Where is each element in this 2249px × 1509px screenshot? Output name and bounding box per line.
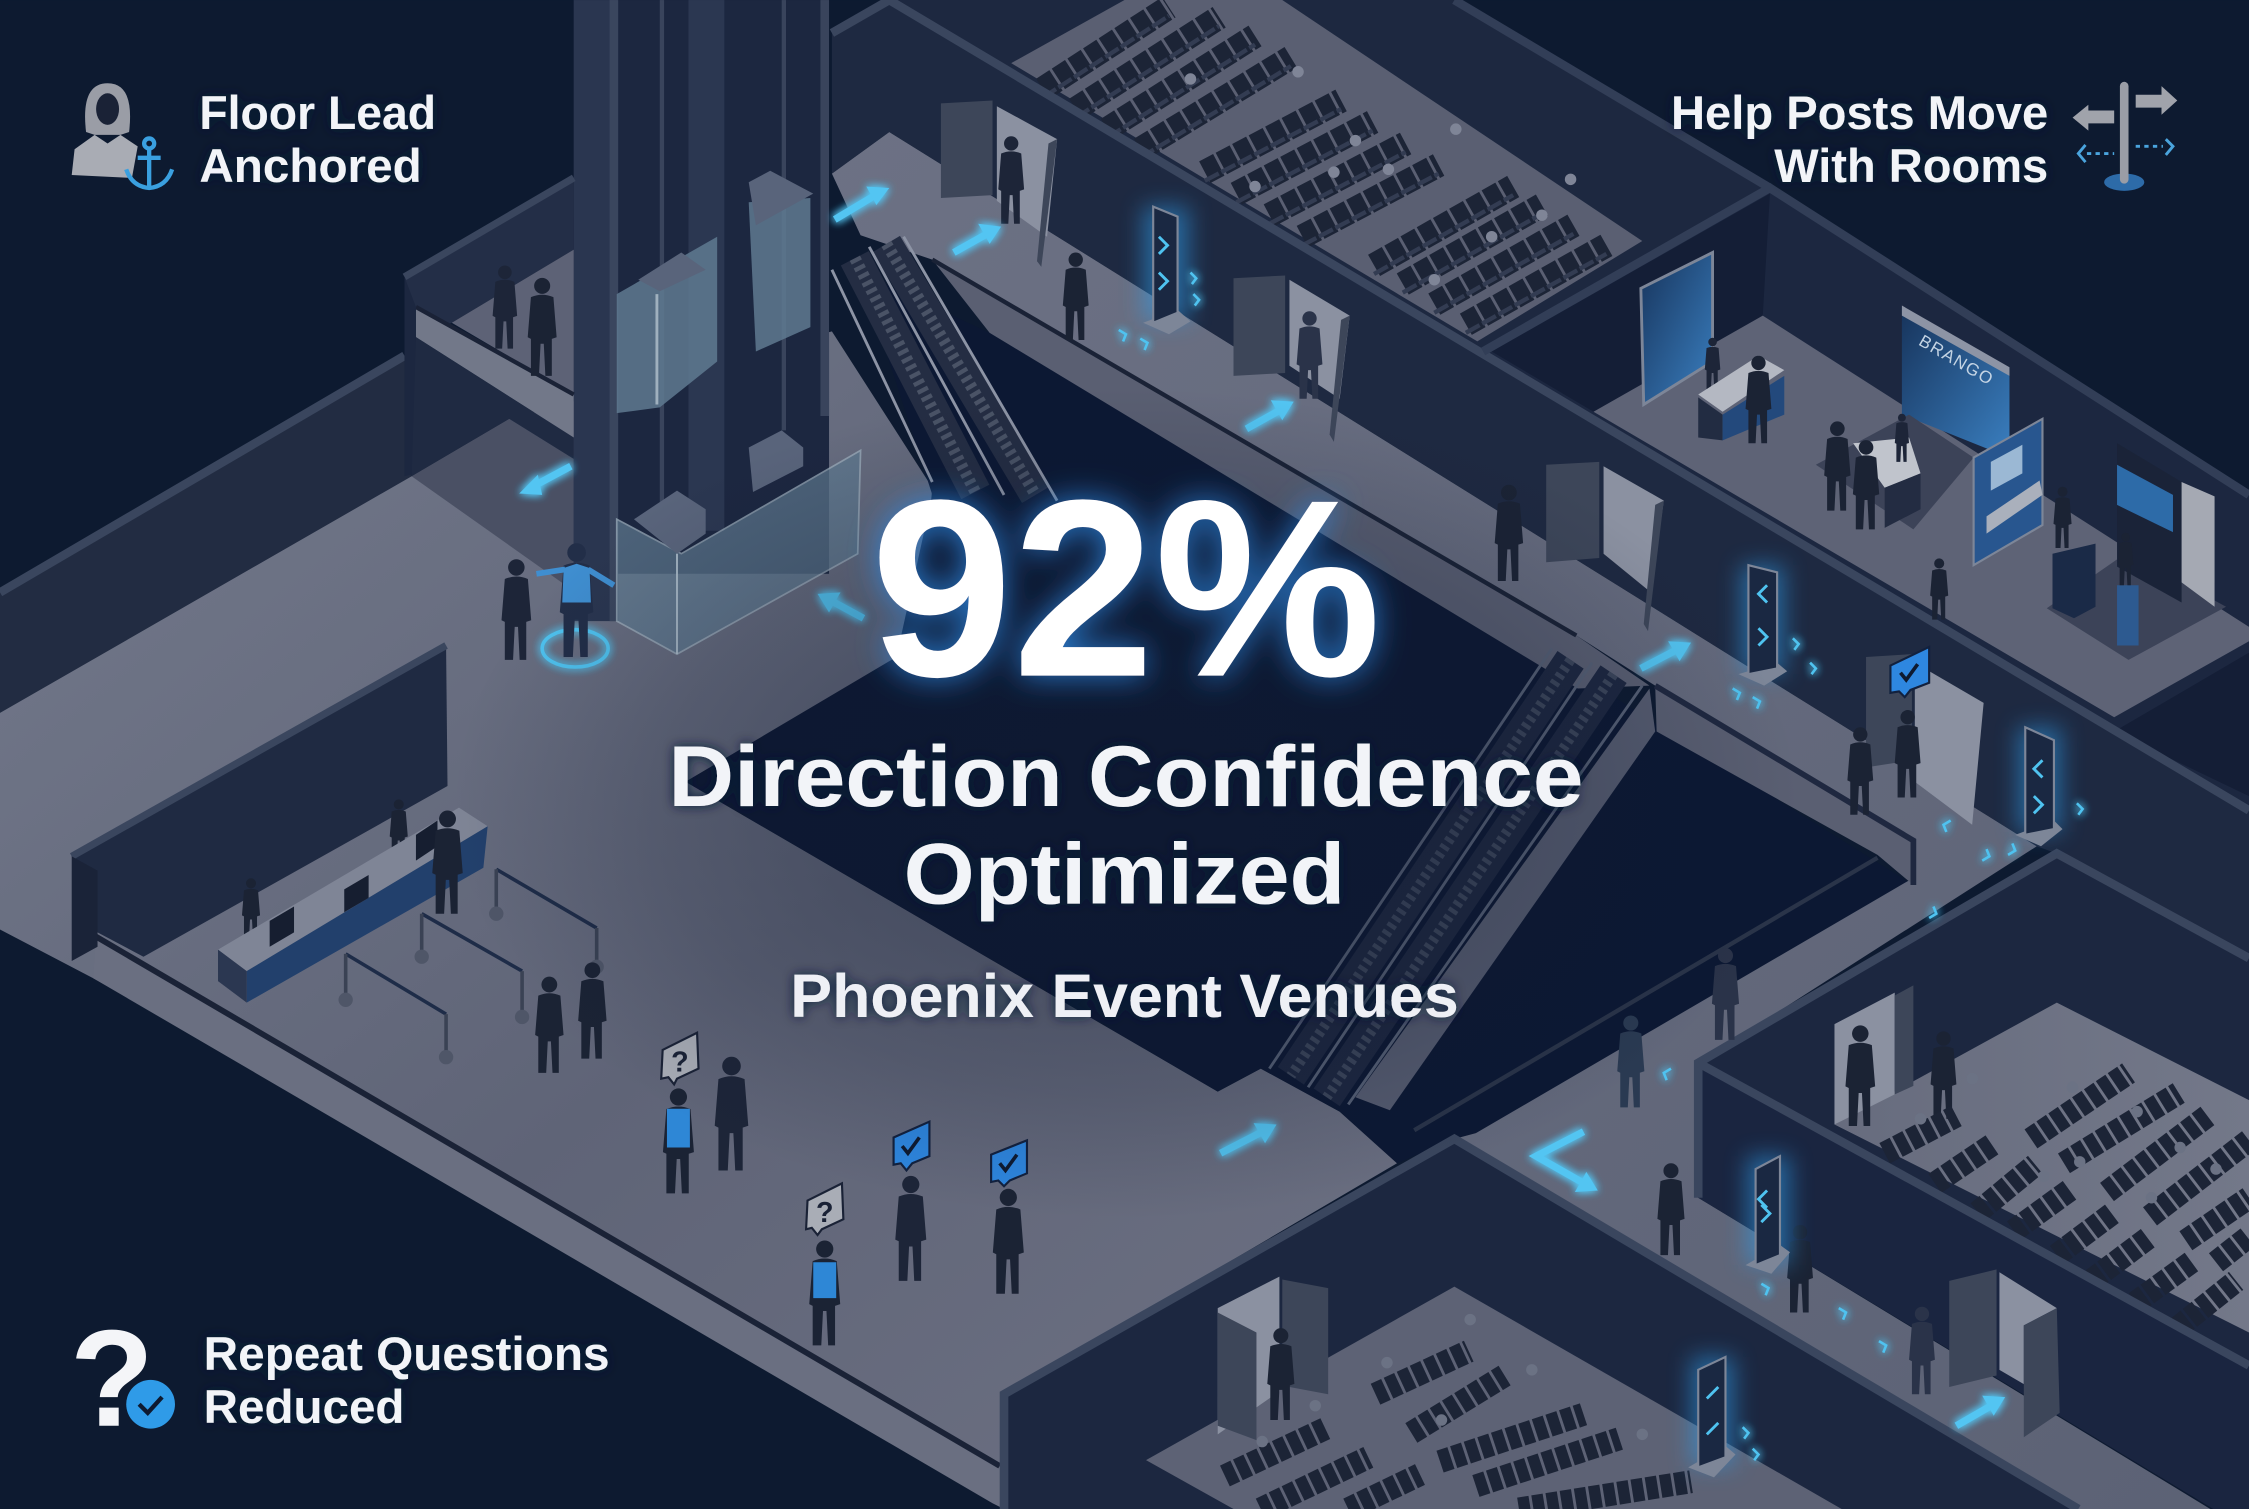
booth: BRANGO backdrop: BRANGO bbox=[1916, 330, 1998, 389]
exhibit room walls bbox=[1483, 188, 2249, 810]
arrow 5 bbox=[1246, 400, 1294, 429]
queue guests bbox=[535, 962, 607, 1073]
lower room floor bbox=[1146, 1287, 1842, 1509]
headline line 2: Optimized bbox=[904, 827, 1345, 923]
upper escalators bbox=[832, 237, 1057, 501]
label: floor lead anchored: Anchored bbox=[199, 140, 422, 193]
upper-left perimeter wall bbox=[0, 356, 412, 713]
lower-right room front wall bbox=[1698, 853, 2249, 1509]
callout: help posts move with rooms bbox=[1671, 82, 2177, 193]
totem panels bbox=[1153, 207, 2054, 1467]
arrow 6 bbox=[1641, 641, 1691, 668]
lower-right chair room walls bbox=[1698, 853, 2249, 1509]
speech bubble: check 1 bbox=[894, 1122, 929, 1170]
wayfinding totems bbox=[1143, 207, 2063, 1477]
elevator core bbox=[574, 0, 829, 621]
arrow 7 bbox=[1221, 1123, 1277, 1153]
arrow 9 bbox=[1536, 1132, 1598, 1192]
question pair bbox=[663, 1057, 748, 1193]
totem chevrons bbox=[1159, 237, 2042, 1434]
totem glows bbox=[1143, 207, 2061, 1466]
lower room chairs bbox=[1225, 1314, 1691, 1509]
corner room at right edge bbox=[2114, 653, 2249, 796]
door 3 bbox=[1546, 462, 1664, 631]
speech bubble: question 2: ? bbox=[816, 1197, 833, 1229]
lower-right room chairs bbox=[1885, 1073, 2249, 1327]
icon: signpost bbox=[2073, 82, 2177, 191]
door 5 bbox=[1949, 1269, 2060, 1437]
lower room door bbox=[1218, 1277, 1328, 1440]
arrow 1 bbox=[835, 187, 889, 220]
door 4 bbox=[1866, 654, 1984, 825]
booth: BRANGO backdrop bbox=[1816, 306, 2009, 529]
shaded floor under bridge bbox=[412, 419, 574, 591]
booth: info kiosk panel bbox=[1974, 419, 2042, 565]
seated attendees in lower room bbox=[1256, 1314, 1648, 1447]
exhibit room floor bbox=[1594, 316, 2249, 717]
door 1 bbox=[941, 100, 1057, 267]
arrow 2 bbox=[954, 224, 1001, 252]
lower room walls bbox=[1004, 1139, 2078, 1509]
arrow 4 bbox=[519, 466, 571, 495]
upper corridor and lower corridor floor bbox=[832, 132, 2210, 1509]
central atrium void bbox=[686, 273, 1913, 1163]
seated audience heads bbox=[1185, 66, 1576, 285]
top audience chairs bbox=[1043, 7, 1606, 333]
callout: repeat questions reduced bbox=[70, 1302, 610, 1456]
lobby front rim bbox=[93, 937, 1004, 1509]
label: repeat questions: Reduced bbox=[204, 1381, 404, 1434]
totem bases bbox=[1143, 310, 2063, 1477]
reception counter bbox=[218, 799, 488, 1003]
main lobby floor bbox=[0, 331, 1397, 1477]
corridor ledge bbox=[932, 260, 1913, 1130]
top audience room back wall bbox=[889, 0, 1770, 354]
callout: floor lead anchored bbox=[72, 83, 436, 193]
arrow 3 bbox=[818, 592, 863, 618]
corridor doors bbox=[941, 100, 2060, 1437]
icon: floor lead with anchor bbox=[72, 83, 172, 188]
lower-right room door opening bbox=[1834, 985, 1956, 1126]
speech bubble: check 2 bbox=[991, 1140, 1027, 1186]
upper thick wall bbox=[832, 0, 2249, 975]
arrow 8 bbox=[1956, 1396, 2005, 1426]
lower escalators bbox=[1269, 648, 1655, 1110]
speech bubble: check 3 bbox=[1890, 647, 1929, 697]
guest with tablet bbox=[809, 1240, 840, 1345]
floor lead with waypoint ring bbox=[536, 543, 614, 667]
corridor walkers bbox=[998, 136, 1935, 1394]
speech bubble: question 2 bbox=[806, 1183, 843, 1235]
floor chevron arrows bbox=[1119, 273, 2083, 1460]
label: repeat questions: Repeat Questions bbox=[204, 1328, 610, 1381]
door 2 bbox=[1234, 275, 1350, 442]
queue stanchions bbox=[338, 869, 604, 1064]
speech bubble: question 1: ? bbox=[671, 1046, 689, 1078]
seated attendees bbox=[1915, 1073, 2222, 1203]
headline stat: 92% bbox=[871, 448, 1381, 730]
cyan direction arrows bbox=[519, 187, 2005, 1426]
booth: display and counter bbox=[1930, 443, 2226, 660]
headline line 1: Direction Confidence bbox=[668, 729, 1583, 825]
reception wall bbox=[72, 645, 448, 961]
booth: banner and front desk bbox=[1604, 252, 1784, 456]
icon: question with check: ? bbox=[70, 1302, 154, 1456]
label: help posts: With Rooms bbox=[1774, 140, 2048, 193]
top audience room floor bbox=[1011, 0, 1642, 341]
lower room ridges bbox=[1004, 1139, 2078, 1509]
label: help posts: Help Posts Move bbox=[1671, 87, 2048, 140]
speech bubble: question 1 bbox=[661, 1033, 699, 1084]
elevator car right bbox=[749, 171, 813, 351]
central darkening behind headline bbox=[452, 387, 1800, 1219]
elevator car left bbox=[617, 237, 717, 413]
subtitle: Phoenix Event Venues bbox=[790, 962, 1459, 1031]
bridge walkway bbox=[404, 178, 574, 476]
confident guests bbox=[895, 1176, 1024, 1294]
guest at floor lead bbox=[502, 559, 531, 660]
glass lobby box bbox=[617, 430, 861, 654]
lower-right chair room floor bbox=[1834, 1003, 2249, 1333]
label: floor lead anchored: Floor Lead bbox=[199, 87, 436, 140]
